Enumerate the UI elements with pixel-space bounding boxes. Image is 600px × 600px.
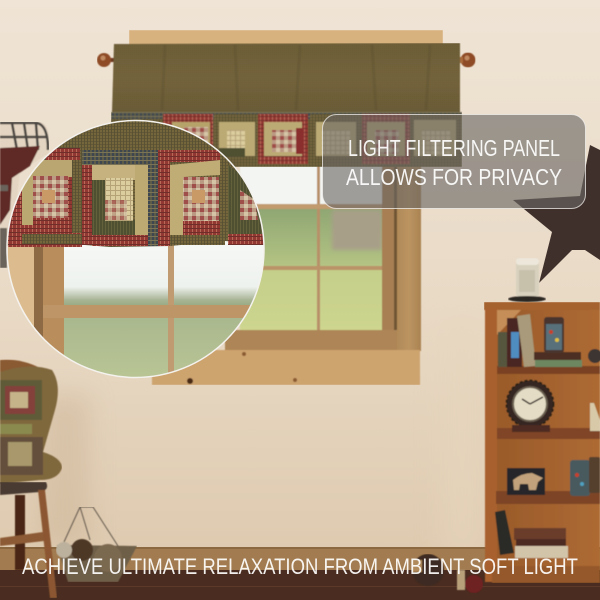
curtain rod [97,52,476,68]
clock [506,380,554,432]
patch block [258,114,308,164]
upper glass left [64,240,168,305]
valance [111,43,462,167]
valance header fabric [112,43,460,113]
baseboard and floor [0,547,600,600]
magnified patchwork [8,161,238,247]
block one [8,148,84,247]
circle border [7,120,264,378]
window header board [129,30,443,48]
magnified valance fabric [58,121,208,152]
patch block [310,114,362,164]
bear box [507,468,545,495]
lower glass right [174,318,243,371]
upper glass right [174,240,266,305]
muntins [317,165,320,330]
window glass middle [240,208,385,268]
tobacco basket wall decor [0,122,49,268]
block two [82,150,158,246]
block four [228,165,264,245]
casing and frame [8,247,34,326]
floor ornaments [412,554,483,593]
candle on plate [508,258,546,302]
pillow [0,360,62,484]
window sill [225,330,397,350]
books upper [498,314,582,367]
marble jar [544,317,564,353]
window glass lower [240,268,385,330]
bookshelf [484,302,600,583]
callout background [322,114,586,208]
patch block [163,114,213,164]
block three [158,150,225,246]
window glass upper [240,165,385,210]
white ornament and dark object [588,349,600,431]
window [129,30,443,385]
star decoration [513,145,600,283]
callout: light filtering panel [322,114,586,208]
chair [0,482,57,598]
wall shadows [40,320,484,560]
magnified detail circle [0,118,270,380]
valance patchwork band [111,112,462,167]
lower glass left [64,318,168,380]
patch block [362,114,410,164]
books lower [495,510,568,558]
shelf top and side [484,302,600,310]
wire basket with balls [56,507,137,582]
right sash and casing [382,165,396,350]
muntins [168,240,174,380]
patch block [214,114,258,162]
marble jars lower [570,457,600,496]
shelves [497,366,600,374]
patch block [410,114,462,164]
